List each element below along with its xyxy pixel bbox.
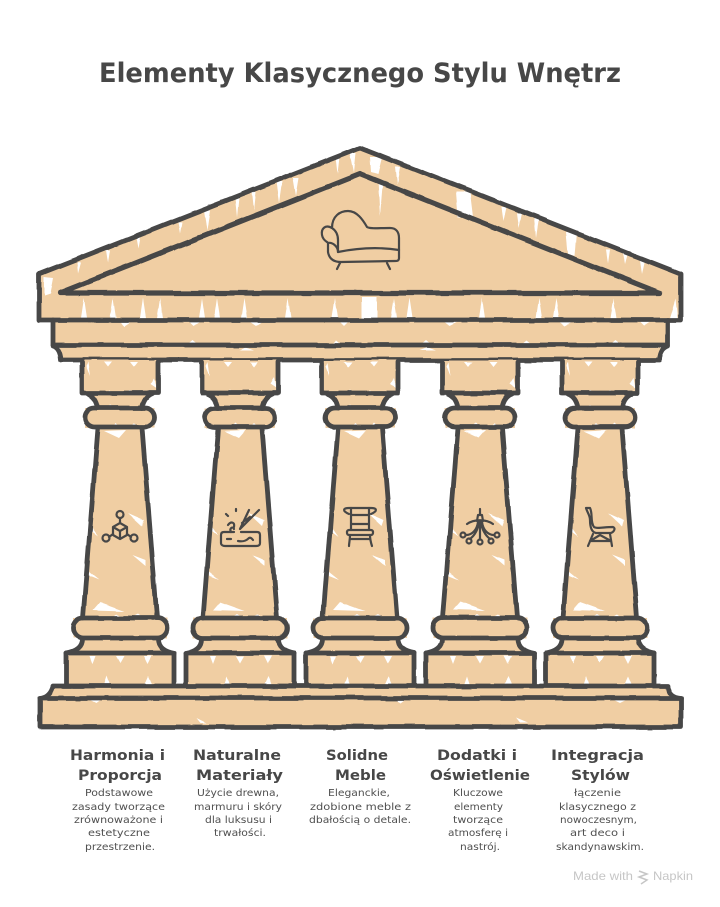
description: [556, 788, 644, 853]
description: [72, 788, 165, 853]
heading: Oświetlenie: [430, 768, 530, 784]
column 5: [546, 360, 654, 685]
heading: Stylów: [571, 768, 630, 784]
description: elementy: [454, 802, 503, 813]
description: klasycznego z: [559, 802, 636, 813]
heading: Materiały: [196, 768, 284, 784]
icon: chaise longue: [322, 211, 399, 269]
label 2: Naturalne Materiały: [193, 748, 284, 839]
icon: material slab and tool: [221, 509, 260, 546]
description: tworzące: [453, 815, 503, 826]
heading: [326, 748, 388, 784]
heading: Proporcja: [78, 768, 162, 784]
heading: Harmonia i: [70, 748, 165, 764]
icon: classical chair: [344, 508, 376, 546]
description: marmuru i skóry: [194, 801, 282, 813]
description: dbałością o detale.: [309, 814, 411, 826]
description: łączenie: [574, 788, 621, 799]
label 4: Dodatki i Oświetlenie: [430, 748, 530, 853]
pediment and entablature: [39, 148, 681, 360]
heading: [551, 748, 644, 784]
label 5: Integracja Stylów: [551, 748, 644, 853]
description: przestrzenie.: [85, 842, 155, 853]
stylobate base: [40, 686, 681, 727]
description: zrównoważone i: [74, 814, 163, 826]
watermark: Made with Napkin: Napkin: [653, 869, 693, 883]
description: Podstawowe: [85, 788, 153, 799]
description: trwałości.: [214, 827, 266, 839]
description: Użycie drewna,: [197, 788, 279, 799]
description: estetyczne: [88, 828, 150, 839]
column 4: [426, 360, 534, 685]
icon: chandelier: [460, 509, 500, 544]
label 3: Solidne Meble: [309, 748, 411, 826]
heading: [430, 748, 530, 784]
description: zasady tworzące: [72, 802, 165, 813]
heading: [70, 748, 165, 784]
icon: cube network: [102, 511, 138, 542]
temple illustration: [39, 148, 681, 727]
column 2: [186, 360, 294, 685]
description: atmosferę i: [448, 828, 508, 839]
heading: [193, 748, 284, 784]
description: dla luksusu i: [205, 815, 272, 826]
description: [448, 788, 508, 853]
description: skandynawskim.: [556, 842, 644, 853]
heading: Naturalne: [193, 748, 281, 764]
heading: Meble: [335, 768, 386, 784]
description: art deco i: [570, 828, 625, 839]
description: Kluczowe: [453, 788, 503, 799]
description: Eleganckie,: [328, 788, 390, 799]
description: [309, 788, 411, 826]
description: [194, 788, 282, 839]
heading: Dodatki i: [437, 748, 517, 764]
watermark: Made with Napkin: [573, 869, 693, 884]
column 3: [306, 360, 414, 685]
description: zdobione meble z: [310, 802, 411, 813]
description: nowoczesnym,: [560, 815, 637, 826]
label 1: Harmonia i Proporcja: [70, 748, 165, 853]
icon: modern chair: [586, 508, 614, 546]
heading: Solidne: [326, 748, 388, 764]
watermark: Made with Napkin: Made with: [573, 869, 633, 883]
heading: Integracja: [551, 748, 644, 764]
column 1: [66, 360, 174, 685]
title: Elementy Klasycznego Stylu Wnętrz: [99, 58, 621, 89]
description: nastrój.: [460, 841, 500, 853]
